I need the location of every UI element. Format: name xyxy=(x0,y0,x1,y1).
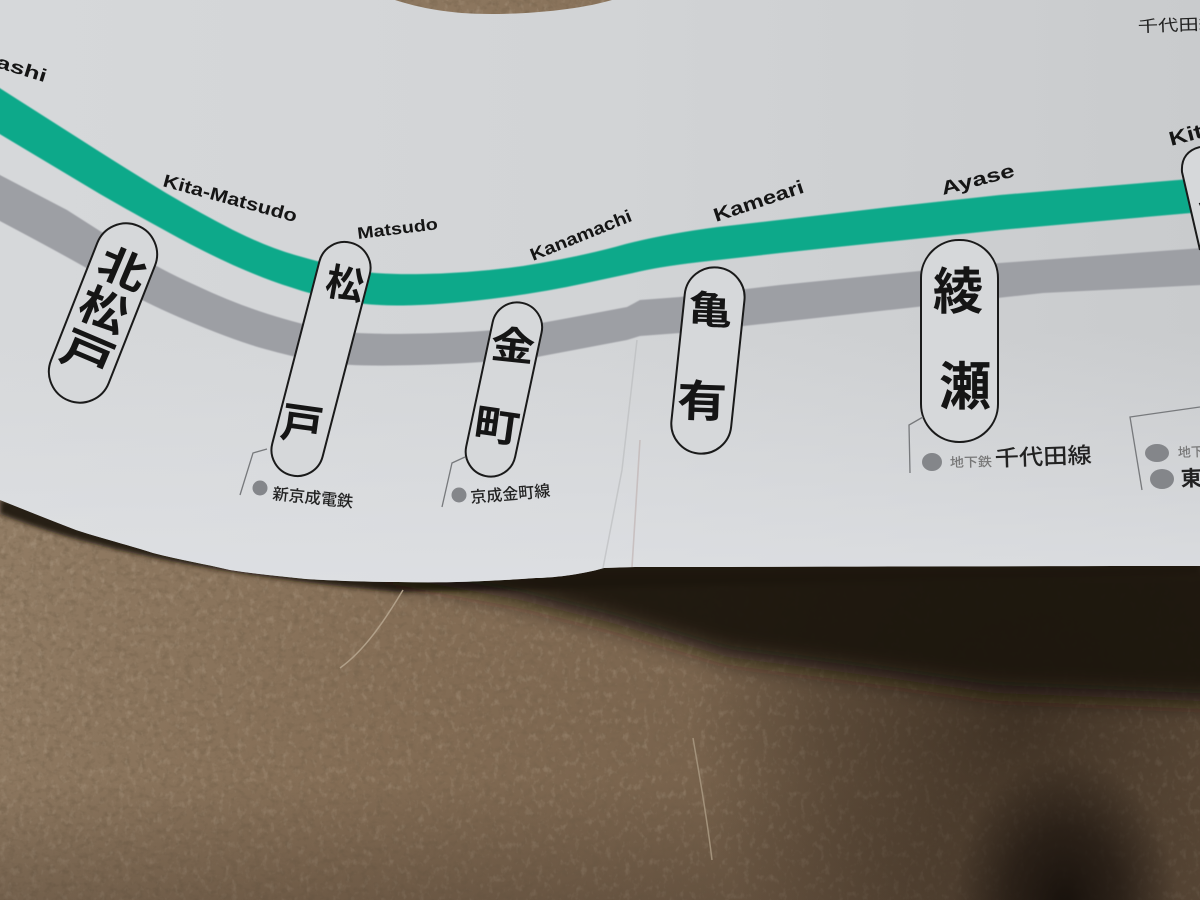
transfer note: Shin-Keisei xyxy=(240,449,355,512)
station pill: Ayase: 瀬 xyxy=(939,345,991,420)
roman label: Matsudo: Matsudo xyxy=(356,215,439,243)
station pill: Kanamachi: 金 xyxy=(488,313,538,373)
station pill: Kanamachi: 町 xyxy=(471,392,524,455)
transfer note: Keisei Kanamachi line xyxy=(442,457,551,508)
roman label: Kanamachi: Kanamachi xyxy=(527,206,635,265)
station pill: Matsudo xyxy=(270,240,372,478)
transfer note: Shin-Keisei: 新京成電鉄 xyxy=(271,480,355,512)
station pill: Kanamachi xyxy=(464,301,544,478)
grey track band xyxy=(0,174,1200,366)
transfer note: Chiyoda line: 千代田線 xyxy=(994,438,1092,473)
paper sheet xyxy=(0,0,1200,600)
station pill: Kameari: 亀 xyxy=(687,278,733,336)
station pill: Ayase: 綾 xyxy=(933,252,983,324)
roman label: Kita-Matsudo: Kita-Matsudo xyxy=(161,171,299,226)
station pill: Kita-Matsudo: 北 xyxy=(90,229,158,303)
roman label: Kameari: Kameari xyxy=(711,177,807,227)
transfer note: Chiyoda line xyxy=(909,417,1092,473)
station pill: Ayase xyxy=(921,240,998,442)
station pill: Kita-Matsudo xyxy=(48,222,158,404)
station pill: Matsudo: 戸 xyxy=(277,388,327,455)
station pill: Kita-Matsudo: 松 xyxy=(70,269,139,346)
transfer note: Chiyoda line: 地下鉄 xyxy=(950,451,992,471)
station pill: Kita-Matsudo: 戸 xyxy=(52,312,126,390)
station pill: Kameari xyxy=(668,264,748,457)
transfer note: Kita-Senju lines xyxy=(1130,407,1200,493)
station pill: Kameari: 有 xyxy=(676,366,728,431)
station pill: Kita-Senju (cut off) xyxy=(1182,147,1200,250)
transfer note: Keisei Kanamachi line: 京成金町線 xyxy=(469,477,551,508)
station pill: Matsudo: 松 xyxy=(322,251,369,311)
green line band xyxy=(0,87,1200,306)
roman label: Ayase: Ayase xyxy=(939,161,1017,200)
